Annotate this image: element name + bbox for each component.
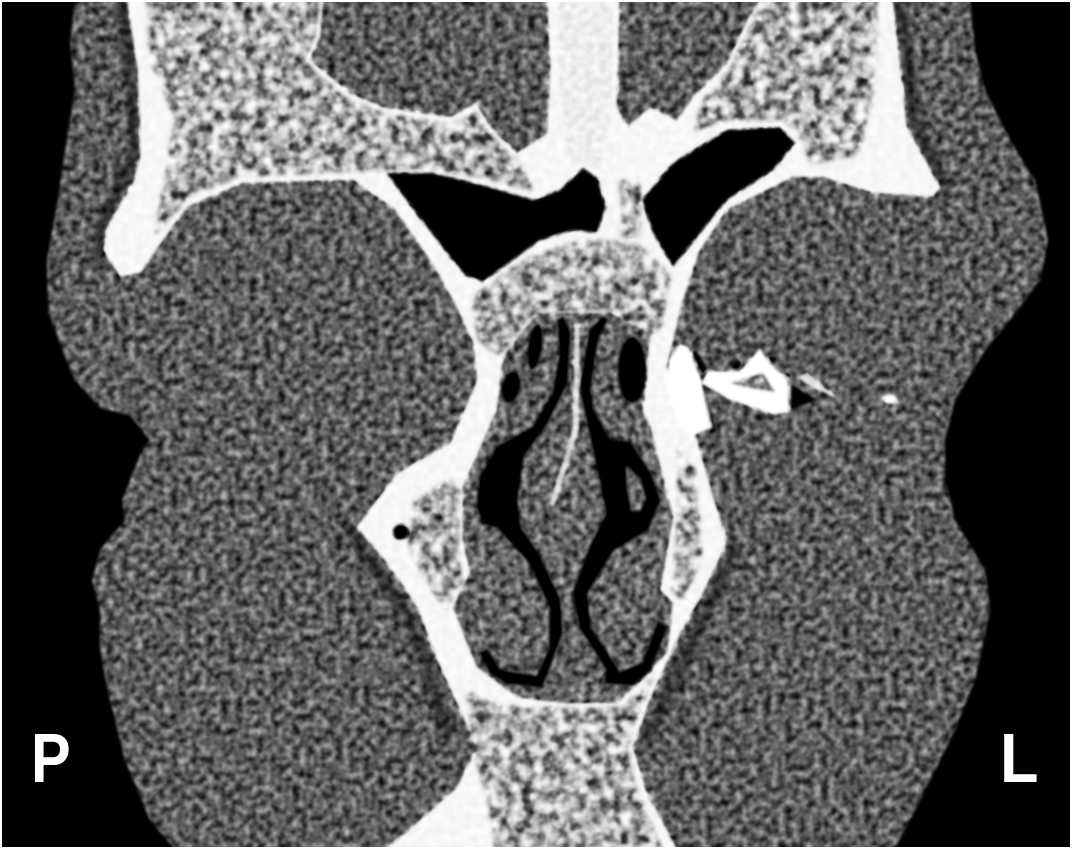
- metal fragment, ring: [703, 350, 788, 413]
- left frontal sinus (air): [387, 168, 606, 282]
- bright vertical frontal crest: [558, 0, 612, 170]
- side label P: P: [31, 718, 71, 797]
- distant metal speck: [883, 394, 897, 404]
- ring interior: [730, 373, 775, 392]
- ethmoid air cell, lower left: [498, 368, 524, 406]
- nasal cavity: [453, 313, 673, 703]
- metallic foreign body: [667, 345, 897, 435]
- skull bone: orbital roofs, frontal bone, nasal walls and maxilla: [103, 0, 940, 849]
- left nasal air passage: [477, 317, 570, 687]
- infraorbital canal: [393, 524, 409, 540]
- middle turbinate fragment: [627, 467, 645, 510]
- air pocket: [790, 385, 817, 410]
- dark halo beside skull edges: [95, 0, 948, 745]
- nasal septum: [552, 325, 577, 505]
- right frontal sinus (air): [642, 127, 795, 267]
- cancellous bone texture: [147, 0, 878, 849]
- metal fragment, large: [667, 345, 710, 435]
- right nasal air passage: [573, 317, 667, 685]
- dark gaps around the metal: [693, 352, 787, 433]
- side label L: L: [1000, 720, 1038, 798]
- streak artefact: [797, 372, 837, 398]
- mucosa and turbinates: [453, 313, 673, 703]
- ethmoid air cell, upper left: [524, 322, 546, 372]
- ethmoid air cell, right: [617, 336, 647, 404]
